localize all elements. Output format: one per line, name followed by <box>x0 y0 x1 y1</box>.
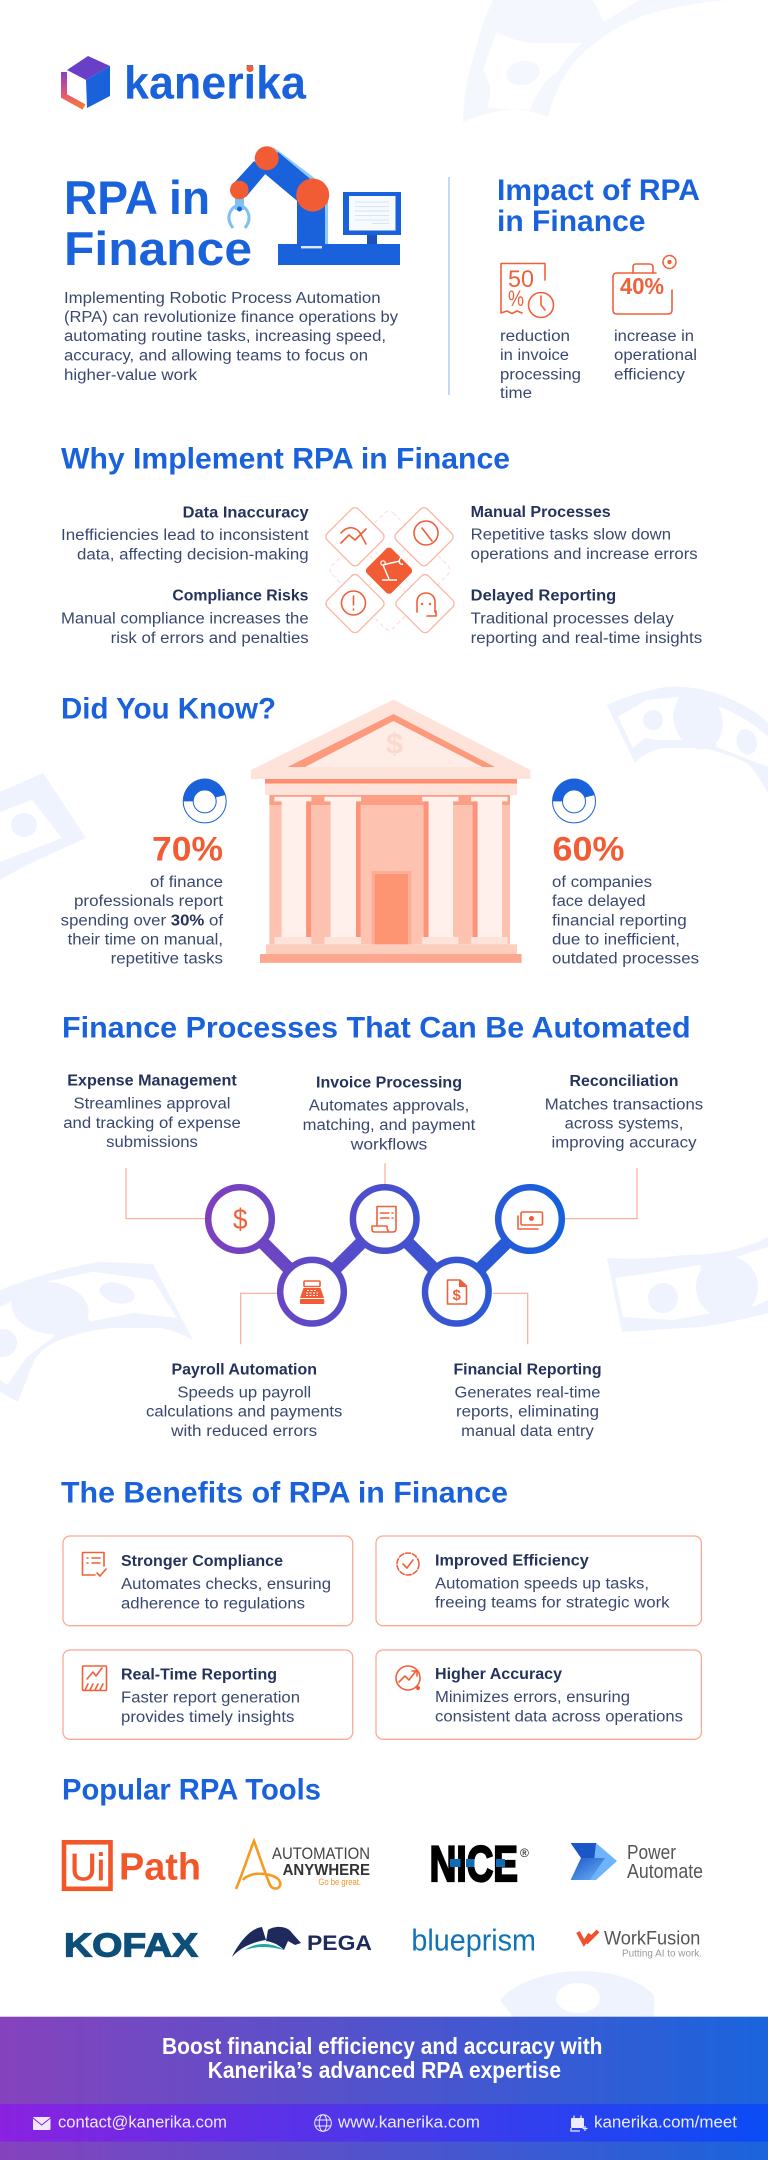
footer band <box>0 2017 768 2160</box>
heading: impact of RPA in finance <box>497 174 700 238</box>
process text: invoice processing: matching, and payment <box>303 1117 476 1134</box>
process text: invoice processing <box>303 1075 476 1153</box>
panel: data inaccuracy: Data Inaccuracy <box>183 504 309 522</box>
call to action: Boost financial efficiency and accuracy with <box>162 2033 602 2059</box>
icon: 50 percent receipt and clock: 50 <box>508 266 534 293</box>
panel: delayed reporting: reporting and real-time insights <box>471 630 702 647</box>
stat: 60 percent: financial reporting <box>552 912 687 929</box>
process text: expense management <box>63 1072 241 1151</box>
icon: mail <box>33 2117 50 2130</box>
logo: Blue Prism: blueprism <box>411 1923 536 1958</box>
donut chart: 70 percent <box>183 778 226 823</box>
heading: popular tools: Popular RPA Tools <box>62 1773 321 1806</box>
icon: document dollar <box>448 1280 466 1304</box>
intro paragraph <box>64 290 398 384</box>
intro paragraph: Implementing Robotic Process Automation <box>64 290 381 307</box>
process text: financial reporting: Generates real-time <box>454 1384 600 1401</box>
logo: WorkFusion: Putting AI to work. <box>622 1949 702 1960</box>
stat: 70 percent <box>61 830 224 968</box>
card: improved efficiency <box>376 1536 701 1626</box>
logo: Power Automate: Power <box>627 1842 676 1864</box>
title: Finance <box>64 222 252 275</box>
website: www.kanerika.com <box>337 2113 480 2132</box>
process text: payroll automation: with reduced errors <box>170 1423 317 1440</box>
process text: reconciliation: improving accuracy <box>552 1135 697 1152</box>
icon: invoice receipt <box>372 1206 396 1232</box>
process text: invoice processing: workflows <box>350 1136 428 1153</box>
heading: impact of RPA in finance: Impact of RPA <box>497 174 700 207</box>
stat: 60 percent: outdated processes <box>552 951 699 968</box>
card: higher accuracy: consistent data across operations <box>435 1708 683 1725</box>
card: real-time reporting <box>63 1650 353 1739</box>
logo: UiPath <box>64 1842 201 1889</box>
panel: data inaccuracy: data, affecting decision-making <box>77 546 309 563</box>
process text: expense management: Streamlines approval <box>74 1096 230 1113</box>
intro paragraph: (RPA) can revolutionize finance operations by <box>64 309 398 326</box>
process text: expense management: and tracking of expense <box>63 1115 241 1132</box>
process text: reconciliation <box>545 1073 703 1152</box>
process chain of rings <box>208 1187 562 1323</box>
logo: Kofax: KOFAX <box>64 1927 198 1964</box>
card: real-time reporting: Real-Time Reporting <box>121 1667 277 1684</box>
logo: Automation Anywhere: Go be great. <box>318 1877 361 1887</box>
process text: expense management: Expense Management <box>67 1072 237 1089</box>
stat text: increase in operational efficiency: efficiency <box>614 366 685 384</box>
icon: money notes <box>518 1212 542 1229</box>
logo: Power Automate <box>571 1842 703 1883</box>
panel: manual processes <box>471 504 698 563</box>
stat: 60 percent <box>552 830 699 968</box>
heading: impact of RPA in finance: in Finance <box>497 205 646 238</box>
title: RPA in <box>64 171 210 224</box>
card: higher accuracy: Higher Accuracy <box>435 1666 562 1683</box>
icon: 40 percent briefcase and gear <box>613 256 676 314</box>
stat: 70 percent: repetitive tasks <box>111 951 223 968</box>
logo: WorkFusion <box>578 1928 702 1960</box>
process text: invoice processing: Automates approvals, <box>309 1098 469 1115</box>
process text: financial reporting <box>454 1361 602 1440</box>
panel: data inaccuracy <box>61 504 309 563</box>
process text: reconciliation: across systems, <box>565 1116 683 1133</box>
icon: 40 percent briefcase and gear: 40% <box>620 273 664 299</box>
icon: robot arm and monitor <box>229 146 401 265</box>
card: higher accuracy: Minimizes errors, ensuring <box>435 1689 630 1706</box>
icon: cash register <box>300 1281 324 1304</box>
card: real-time reporting: Faster report generation <box>121 1690 300 1707</box>
logo: NICE: NICE <box>430 1836 518 1892</box>
panel: compliance risks: Manual compliance increases the <box>61 611 309 628</box>
panel: manual processes: Repetitive tasks slow down <box>471 527 671 544</box>
panel: delayed reporting: Traditional processes delay <box>471 611 674 628</box>
logo: UiPath: Ui <box>70 1847 105 1889</box>
icon: globe <box>315 2115 331 2131</box>
process text: financial reporting: Financial Reporting <box>454 1361 602 1378</box>
panel: manual processes: Manual Processes <box>471 504 611 521</box>
process text: payroll automation <box>146 1361 343 1440</box>
contact bar <box>0 2104 768 2142</box>
stat text: reduction in invoice processing time: processing <box>500 366 581 384</box>
panel: compliance risks <box>61 587 309 647</box>
card: improved efficiency: freeing teams for strategic work <box>435 1595 670 1612</box>
card: stronger compliance: adherence to regulations <box>121 1595 305 1612</box>
intro paragraph: accuracy, and allowing teams to focus on <box>64 348 368 364</box>
stat: 70 percent: of finance <box>150 874 223 891</box>
stat: 60 percent: face delayed <box>552 893 646 910</box>
stat text: increase in operational efficiency <box>614 328 697 384</box>
process text: financial reporting: reports, eliminating <box>456 1404 599 1421</box>
intro paragraph: higher-value work <box>64 367 197 384</box>
stat: 70 percent: their time on manual, <box>68 931 223 948</box>
stat: 60 percent: due to inefficient, <box>552 931 680 948</box>
logo: Automation Anywhere: AUTOMATION <box>272 1844 370 1863</box>
donut chart: 60 percent <box>552 778 596 823</box>
icon: 50 percent receipt and clock <box>501 264 554 318</box>
stat: 70 percent: 70% <box>152 830 223 868</box>
stat text: increase in operational efficiency: increase in <box>614 328 694 345</box>
intro paragraph: automating routine tasks, increasing speed, <box>64 328 386 345</box>
logo: Pega: PEGA <box>307 1932 372 1955</box>
stat text: reduction in invoice processing time <box>500 328 581 402</box>
process text: reconciliation: Matches transactions <box>545 1096 703 1113</box>
heading: benefits: The Benefits of RPA in Finance <box>61 1477 508 1510</box>
process text: reconciliation: Reconciliation <box>570 1073 678 1090</box>
icon: dollar: $ <box>233 1204 248 1236</box>
heading: why implement: Why Implement RPA in Finance <box>61 442 510 476</box>
stat text: reduction in invoice processing time: time <box>500 385 532 402</box>
logo: kanerika: kanerika <box>124 56 306 108</box>
icon: document dollar: $ <box>452 1287 462 1304</box>
process text: payroll automation: Payroll Automation <box>171 1361 317 1378</box>
process text: invoice processing: Invoice Processing <box>316 1075 462 1092</box>
card: improved efficiency: Improved Efficiency <box>435 1552 589 1569</box>
call to action <box>162 2033 602 2083</box>
title <box>64 171 252 275</box>
card: stronger compliance: Automates checks, ensuring <box>121 1576 331 1593</box>
stat text: reduction in invoice processing time: in invoice <box>500 347 569 364</box>
panel: compliance risks: risk of errors and penalties <box>111 630 309 647</box>
panel: delayed reporting: Delayed Reporting <box>471 587 616 604</box>
meeting link: kanerika.com/meet <box>594 2113 737 2132</box>
stat: 70 percent: professionals report <box>74 893 224 910</box>
icon cluster: diamonds <box>324 506 456 635</box>
card: stronger compliance: Stronger Compliance <box>121 1553 283 1570</box>
process connector lines <box>126 1163 637 1344</box>
logo: UiPath: Path <box>119 1846 201 1888</box>
illustration: bank building <box>251 700 530 963</box>
process text: payroll automation: Speeds up payroll <box>177 1384 311 1401</box>
icon: 50 percent receipt and clock: % <box>508 286 524 311</box>
logo: Pega <box>232 1927 372 1957</box>
process text: financial reporting: manual data entry <box>461 1423 594 1440</box>
panel: manual processes: operations and increase errors <box>471 546 698 563</box>
icon: calendar <box>571 2116 588 2131</box>
panel: data inaccuracy: Inefficiencies lead to inconsistent <box>61 527 309 544</box>
stat: 60 percent: 60% <box>552 830 624 868</box>
call to action: Kanerika’s advanced RPA expertise <box>208 2057 561 2083</box>
stat text: reduction in invoice processing time: reduction <box>500 328 570 345</box>
card: real-time reporting: provides timely insights <box>121 1709 295 1726</box>
logo: Power Automate: Automate <box>627 1861 703 1883</box>
contact email: contact@kanerika.com <box>58 2113 227 2132</box>
logo: Automation Anywhere <box>236 1841 370 1889</box>
process text: payroll automation: calculations and payments <box>146 1404 343 1421</box>
card: improved efficiency: Automation speeds up tasks, <box>435 1575 649 1592</box>
card: stronger compliance <box>63 1536 353 1626</box>
logo: Automation Anywhere: ANYWHERE <box>283 1862 370 1879</box>
stat: 70 percent: spending over 30% of <box>61 912 224 929</box>
illustration: bank building: $ <box>386 728 403 761</box>
logo: NICE: ® <box>520 1846 529 1860</box>
heading: finance processes: Finance Processes That Can Be Automated <box>62 1011 691 1044</box>
heading: did you know: Did You Know? <box>61 692 276 726</box>
stat: 60 percent: of companies <box>552 874 652 891</box>
card: higher accuracy <box>376 1650 701 1739</box>
panel: delayed reporting <box>471 587 702 647</box>
panel: compliance risks: Compliance Risks <box>172 587 309 604</box>
process text: expense management: submissions <box>106 1134 198 1151</box>
stat text: increase in operational efficiency: operational <box>614 347 697 364</box>
logo: WorkFusion: WorkFusion <box>604 1928 700 1949</box>
